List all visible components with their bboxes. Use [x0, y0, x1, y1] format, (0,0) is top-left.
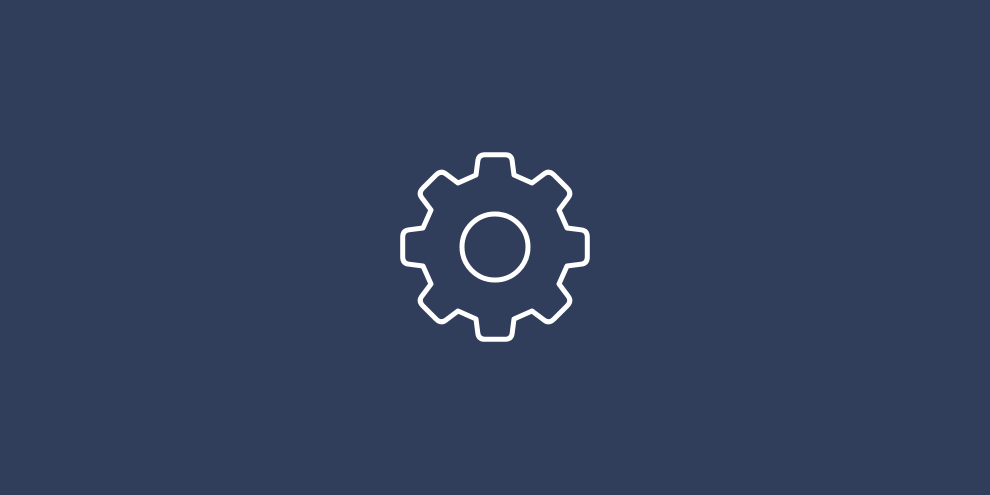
icon: gear — [403, 155, 587, 339]
gear outline with eight teeth — [403, 155, 587, 339]
gear centre circle — [462, 214, 528, 280]
